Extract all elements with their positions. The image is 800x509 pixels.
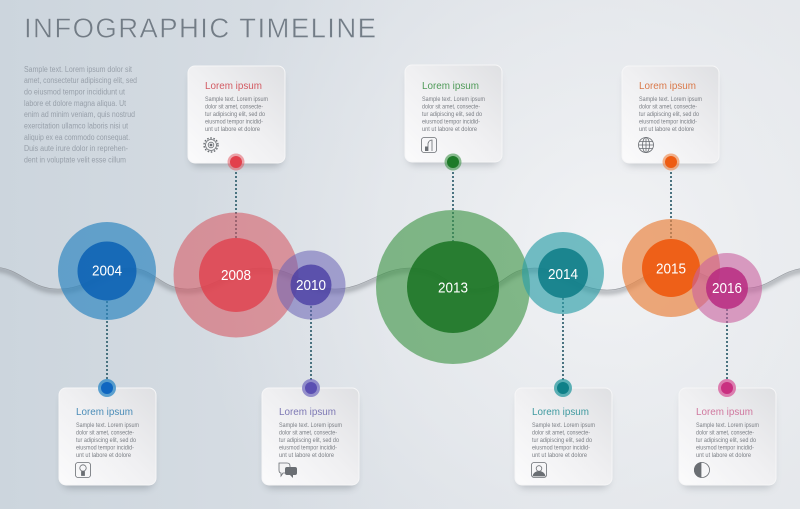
intro text block: exercitation ullamco laboris nisi ut [24,122,129,130]
circle: 2004: 2004 [92,262,122,280]
card body text: Sample text. Lorem ipsum [205,96,268,103]
card body text: unt ut labore et dolore [76,452,131,459]
icon: speech bubbles [279,463,297,478]
card body text: eiusmod tempor incidid- [279,444,337,452]
card body text: tur adipiscing elit, sed do [205,111,265,118]
card body text: Sample text. Lorem ipsum [422,96,485,103]
card title: Lorem ipsum [696,406,753,418]
card body text: Sample text. Lorem ipsum [76,422,139,429]
card body text: unt ut labore et dolore [639,126,694,133]
icon: chart in square [422,138,436,152]
card: 2013 green [405,65,502,165]
circle: 2008 [174,212,298,338]
circle: 2015: 2015 [656,260,686,278]
icon: person in square [532,462,546,478]
card: 2004 blue [59,388,156,488]
card body text: unt ut labore et dolore [205,126,260,133]
pin: 2004 [98,379,116,397]
card body text [205,96,268,133]
card title: Lorem ipsum [205,80,262,92]
card body text: Sample text. Lorem ipsum [279,422,342,429]
card body text: dolor sit amet, consecte- [205,104,263,110]
card body text: eiusmod tempor incidid- [422,118,480,126]
card body text: Sample text. Lorem ipsum [696,422,759,429]
circle: 2016 [692,253,762,323]
circle: 2014 [522,232,604,314]
intro text block: enim ad minim veniam, quis nostrud [24,110,135,119]
intro text block [24,65,137,164]
card body text: Sample text. Lorem ipsum [639,96,702,103]
circle: 2013: 2013 [438,280,468,296]
circle: 2008: 2008 [221,267,251,284]
wave timeline ribbon [0,267,800,292]
card body text: dolor sit amet, consecte- [279,430,337,436]
pin: 2010 [302,379,320,397]
card body text: dolor sit amet, consecte- [696,430,754,436]
card body text [639,96,702,133]
card body text: tur adipiscing elit, sed do [76,437,136,444]
card body text: tur adipiscing elit, sed do [696,437,756,444]
card body text [696,422,759,459]
card title: Lorem ipsum [532,406,589,418]
intro text block: amet, consectetur adipiscing elit, sed [24,76,137,85]
card body text [279,422,342,459]
card body text: eiusmod tempor incidid- [696,444,754,452]
pin: 2013 [444,154,462,170]
intro text block: Sample text. Lorem ipsum dolor sit [24,65,133,74]
card body text: unt ut labore et dolore [696,452,751,459]
intro text block: aliquip ex ea commodo consequat. [24,133,130,142]
intro text block: dent in voluptate velit esse cillum [24,156,126,164]
card body text: eiusmod tempor incidid- [532,444,590,452]
card body text [76,422,139,459]
card body text [532,422,595,459]
card body text: tur adipiscing elit, sed do [532,437,592,444]
card body text: dolor sit amet, consecte- [532,430,590,436]
circle: 2014: 2014 [548,266,578,283]
pin: 2016 [718,379,736,397]
card body text: tur adipiscing elit, sed do [639,111,699,118]
card: 2008 red [188,66,285,166]
card body text: tur adipiscing elit, sed do [279,437,339,444]
card body text: dolor sit amet, consecte- [639,104,697,110]
card: 2014 teal [515,388,612,488]
icon: globe [638,138,654,152]
card title: Lorem ipsum [422,80,479,92]
card body text: unt ut labore et dolore [279,452,334,459]
pin: 2015 [662,154,680,170]
icon: bulb in square [76,462,90,478]
card body text: unt ut labore et dolore [422,126,477,133]
card: 2010 purple [262,388,359,488]
card body text: dolor sit amet, consecte- [76,430,134,436]
card body text: Sample text. Lorem ipsum [532,422,595,429]
icon: gear [204,138,218,152]
icon: pie chart [694,462,710,478]
intro text block: Duis aute irure dolor in reprehen- [24,144,128,153]
circle: 2010: 2010 [296,277,326,294]
card body text: unt ut labore et dolore [532,452,587,459]
card body text: dolor sit amet, consecte- [422,104,480,110]
circle: 2004 [58,222,156,320]
connector lines [107,172,727,381]
card body text [422,96,485,133]
card: 2015 orange [622,66,719,166]
card title: Lorem ipsum [76,406,133,418]
card: 2016 pink [679,388,776,488]
circle: 2016: 2016 [712,280,742,297]
intro text block: do eiusmod tempor incididunt ut [24,88,126,96]
card body text: eiusmod tempor incidid- [76,444,134,452]
card body text: eiusmod tempor incidid- [205,118,263,126]
intro text block: labore et dolore magna aliqua. Ut [24,99,127,108]
pin: 2014 [554,379,572,397]
pin: 2008 [228,154,244,170]
circle: 2010 [276,250,346,320]
card body text: eiusmod tempor incidid- [639,118,697,126]
card body text: tur adipiscing elit, sed do [422,111,482,118]
title: INFOGRAPHIC TIMELINE [24,12,376,44]
circle: 2013 [376,210,530,364]
card title: Lorem ipsum [279,406,336,418]
card title: Lorem ipsum [639,80,696,92]
circle: 2015 [622,219,720,317]
